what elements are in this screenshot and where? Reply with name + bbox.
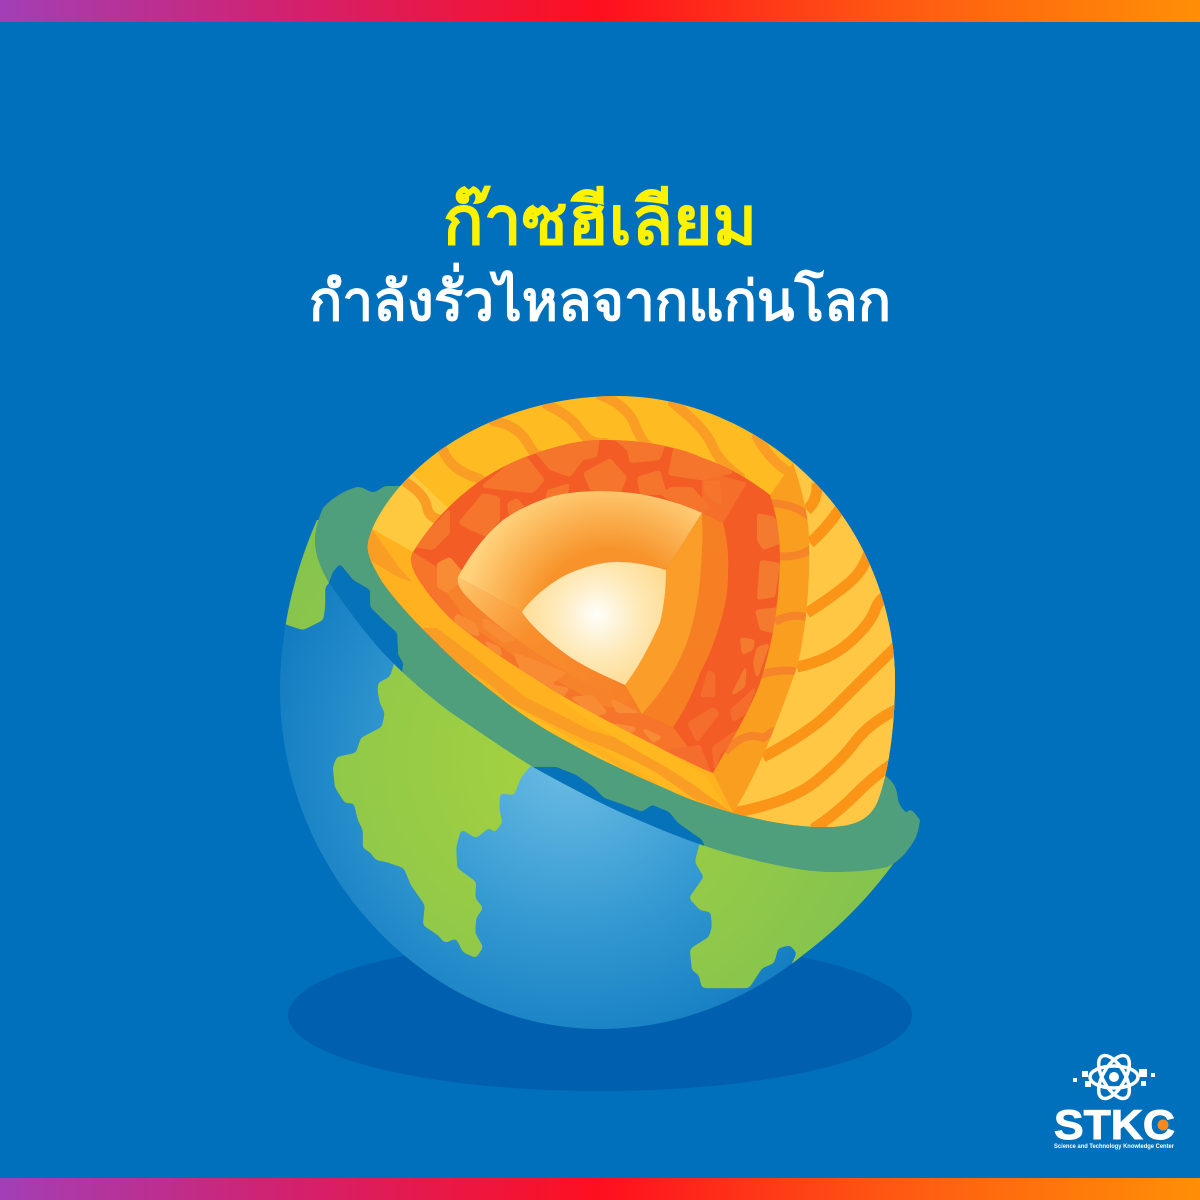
rim band xyxy=(315,486,920,872)
mantle xyxy=(400,435,790,780)
outer core lower-left face xyxy=(458,577,642,714)
logo wordmark: STKC xyxy=(1054,1101,1175,1148)
globe lower hemisphere xyxy=(270,486,950,1029)
ground shadow xyxy=(288,939,912,1091)
mantle lighter wedge near core xyxy=(445,580,642,714)
top gradient bar xyxy=(0,0,1200,22)
bottom gradient bar xyxy=(0,1178,1200,1200)
crust: right stripes xyxy=(733,483,900,829)
continents xyxy=(286,520,894,988)
outer core right face xyxy=(642,513,728,727)
outer core top face xyxy=(458,491,702,612)
mantle top seam xyxy=(702,476,747,523)
sea: left xyxy=(320,564,403,690)
sea: centre xyxy=(525,767,710,860)
title line 1: ก๊าซฮีเลียม xyxy=(443,184,757,259)
logo atom icon xyxy=(1073,1051,1155,1103)
crust: top face xyxy=(360,390,900,830)
title xyxy=(309,184,891,332)
crust lower band: left xyxy=(368,530,412,582)
logo dot xyxy=(1158,1120,1168,1130)
crust lower band: yellow highlight xyxy=(590,742,700,803)
illustration: earth cutaway xyxy=(280,396,920,1091)
crust: right face xyxy=(733,463,905,840)
mantle blobs: lower left xyxy=(437,557,663,743)
mantle blobs: top arch xyxy=(413,436,735,550)
logo tagline: Science and Technology Knowledge Center xyxy=(1054,1144,1175,1150)
outer core right face highlight xyxy=(625,513,702,714)
crust: top stripes xyxy=(407,395,786,520)
mantle lower-left face xyxy=(411,552,688,750)
sea through rim xyxy=(320,564,710,860)
mantle base xyxy=(400,435,790,780)
crust: lower-left face xyxy=(360,529,733,813)
mantle blobs: lower right xyxy=(663,670,757,775)
cutaway layers xyxy=(360,390,905,840)
ocean xyxy=(280,520,918,1029)
crust: middle panel xyxy=(713,463,809,813)
crust lower band: main xyxy=(417,628,733,813)
inner core xyxy=(522,562,666,685)
title line 2: กำลังรั่วไหลจากแก่นโลก xyxy=(309,270,891,332)
mantle blobs: right xyxy=(732,514,780,694)
